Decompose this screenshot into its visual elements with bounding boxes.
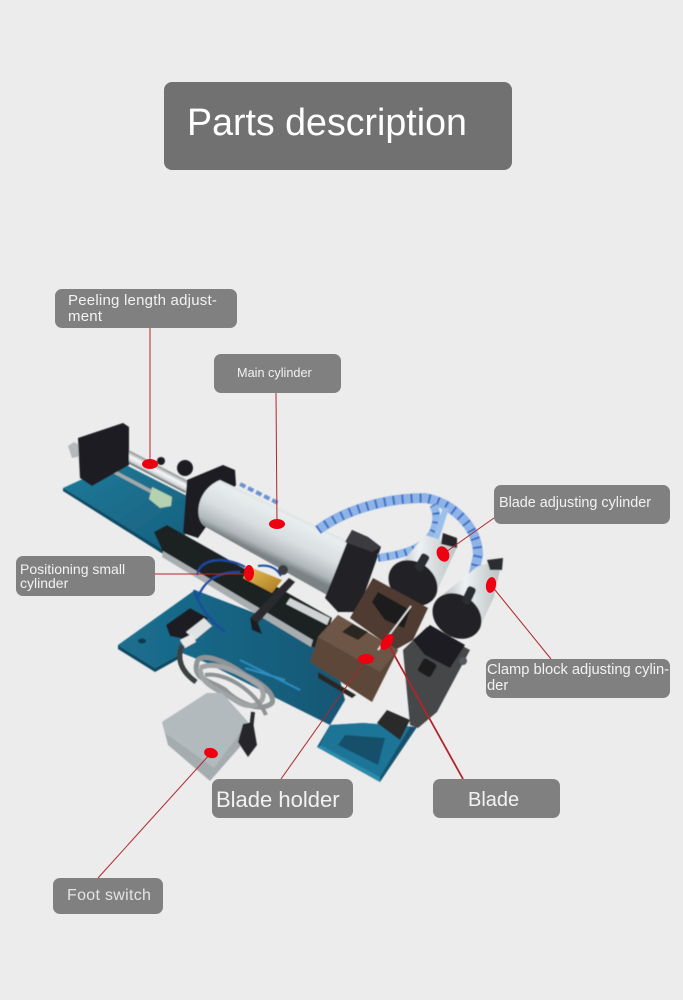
- foot switch: [162, 693, 257, 781]
- rear block and rods: [68, 423, 193, 508]
- blue air hoses: [240, 484, 478, 578]
- label: foot switch: Foot switch: [67, 887, 151, 904]
- label: main cylinder: Main cylinder: [237, 366, 312, 380]
- base plates: [63, 462, 417, 782]
- title text: Parts description: [187, 101, 467, 143]
- label: peeling length adjustment: Peeling length adjust-: [68, 292, 217, 309]
- main cylinder: [183, 465, 381, 612]
- red marker dots: [142, 459, 497, 760]
- label: blade: Blade: [468, 789, 519, 811]
- label: clamp block adjusting cylinder: [486, 659, 670, 698]
- label: blade adjusting cylinder: [494, 485, 670, 524]
- label: blade adjusting cylinder: Blade adjusting cylinder: [499, 495, 651, 511]
- label: clamp block adjusting cylinder: der: [487, 678, 508, 694]
- solenoid valve: [166, 608, 212, 648]
- label: blade: [433, 779, 560, 818]
- blade holder blocks: [310, 578, 428, 702]
- label: positioning small cylinder: cylinder: [20, 575, 68, 591]
- label: blade holder: [212, 779, 353, 818]
- label: peeling length adjustment: ment: [68, 308, 102, 325]
- label: main cylinder: [214, 354, 341, 393]
- clamp housing: [377, 625, 470, 740]
- callout lines: [98, 328, 551, 878]
- label: positioning small cylinder: [16, 556, 155, 596]
- foot switch cable: [180, 645, 273, 730]
- label: positioning small cylinder: Positioning small: [20, 561, 125, 577]
- label: peeling length adjustment: [55, 289, 237, 328]
- title banner: [164, 82, 512, 170]
- label: clamp block adjusting cylinder: Clamp block adjusting cylin-: [487, 662, 669, 678]
- label: blade holder: Blade holder: [216, 787, 340, 812]
- adjusting cylinders: [380, 533, 503, 648]
- label: foot switch: [53, 878, 163, 914]
- linear rail and bracket: [154, 525, 332, 650]
